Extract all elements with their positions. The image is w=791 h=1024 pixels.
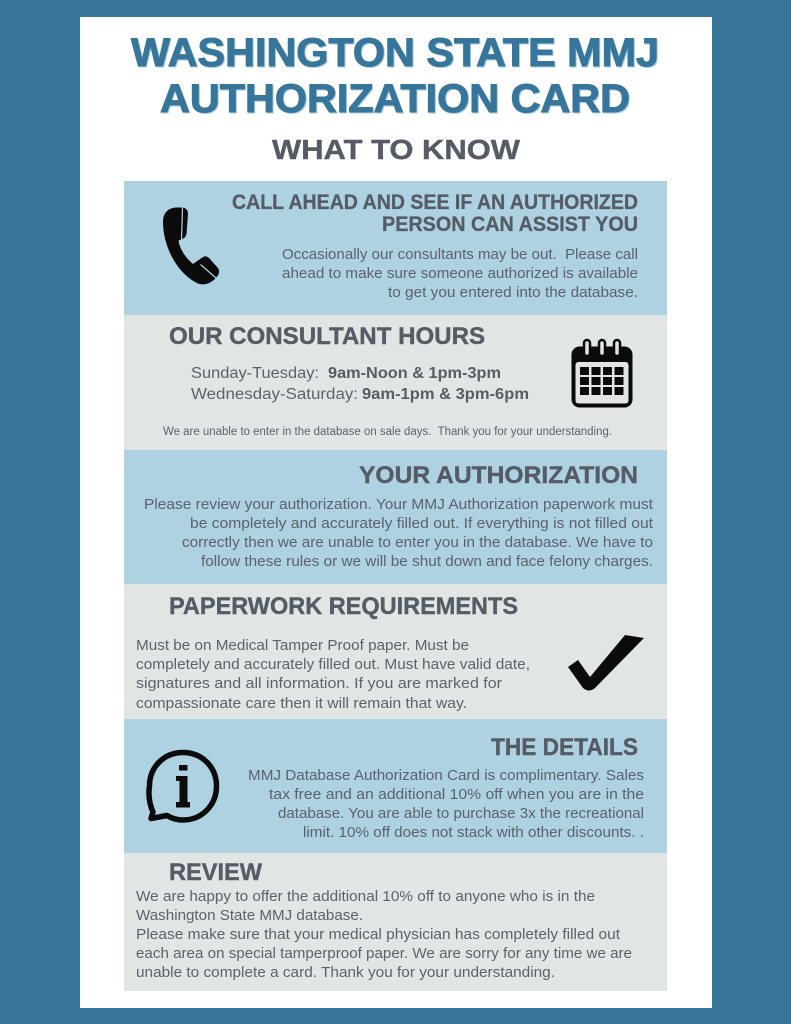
icon: check mark bbox=[568, 635, 644, 690]
title: AUTHORIZATION CARD bbox=[160, 77, 630, 121]
text: authorization details bbox=[144, 497, 653, 570]
text: hours: 9am-Noon & 1pm-3pm bbox=[328, 365, 501, 382]
text: review details: Please make sure that your medical physician has completely filled out bbox=[136, 927, 620, 943]
text: authorization details: be completely and accurately filled out. If everything is not filled out bbox=[190, 516, 653, 532]
panel: your authorization bbox=[124, 450, 667, 584]
text: details: MMJ Database Authorization Card is complimentary. Sales bbox=[248, 768, 644, 784]
text: review details: Washington State MMJ database. bbox=[136, 908, 363, 924]
text: details: limit. 10% off does not stack with other discounts. . bbox=[303, 825, 644, 841]
text: review details: We are happy to offer the additional 10% off to anyone who is in the bbox=[136, 889, 595, 905]
white page card bbox=[80, 17, 712, 1008]
heading: review: REVIEW bbox=[169, 859, 262, 886]
text: paperwork details: signatures and all information. If you are marked for bbox=[136, 676, 502, 692]
note: sale days: We are unable to enter in the database on sale days. Thank you for your understanding. bbox=[163, 426, 612, 438]
icon: telephone bbox=[163, 208, 219, 284]
text: details bbox=[248, 768, 644, 841]
text: review details: unable to complete a card. Thank you for your understanding. bbox=[136, 965, 555, 981]
heading: call ahead: CALL AHEAD AND SEE IF AN AUTHORIZED bbox=[232, 191, 638, 214]
text: review details bbox=[136, 889, 632, 981]
text: details: tax free and an additional 10% off when you are in the bbox=[269, 787, 644, 803]
icon: calendar bbox=[572, 340, 632, 408]
title bbox=[131, 31, 659, 121]
text: hours bbox=[191, 365, 529, 403]
text: hours: Wednesday-Saturday: bbox=[191, 386, 358, 403]
text: hours: 9am-1pm & 3pm-6pm bbox=[362, 386, 529, 403]
text: authorization details: Please review your authorization. Your MMJ Authorization paperwork must bbox=[144, 497, 653, 513]
text: call ahead details: ahead to make sure someone authorized is available bbox=[282, 266, 638, 282]
text: paperwork details bbox=[136, 638, 530, 712]
icon: info speech bubble bbox=[149, 752, 216, 820]
text: review details: each area on special tamperproof paper. We are sorry for any time we are bbox=[136, 946, 632, 962]
heading: call ahead: PERSON CAN ASSIST YOU bbox=[382, 213, 638, 236]
panel: review bbox=[124, 853, 667, 991]
text: authorization details: follow these rules or we will be shut down and face felony charges. bbox=[201, 554, 653, 570]
heading: the details: THE DETAILS bbox=[491, 734, 638, 761]
panel: the details bbox=[124, 719, 667, 853]
heading: call ahead bbox=[232, 191, 638, 236]
panel: call ahead bbox=[124, 181, 667, 315]
heading: consultant hours: OUR CONSULTANT HOURS bbox=[169, 323, 485, 350]
panel: consultant hours bbox=[124, 315, 667, 450]
text: hours: Sunday-Tuesday: bbox=[191, 365, 319, 382]
subtitle: what to know: WHAT TO KNOW bbox=[272, 134, 520, 165]
text: call ahead details bbox=[282, 247, 638, 301]
text: call ahead details: Occasionally our consultants may be out. Please call bbox=[282, 247, 638, 263]
text: details: database. You are able to purchase 3x the recreational bbox=[278, 806, 644, 822]
text: authorization details: correctly then we are unable to enter you in the database. We have to bbox=[182, 535, 653, 551]
heading: paperwork requirements: PAPERWORK REQUIREMENTS bbox=[169, 593, 518, 620]
text: paperwork details: compassionate care then it will remain that way. bbox=[136, 696, 467, 712]
text: call ahead details: to get you entered into the database. bbox=[388, 285, 638, 301]
title: WASHINGTON STATE MMJ bbox=[131, 31, 659, 75]
text: paperwork details: completely and accurately filled out. Must have valid date, bbox=[136, 657, 530, 673]
text: paperwork details: Must be on Medical Tamper Proof paper. Must be bbox=[136, 638, 469, 654]
panel: paperwork requirements bbox=[124, 584, 667, 719]
heading: your authorization: YOUR AUTHORIZATION bbox=[359, 462, 638, 489]
